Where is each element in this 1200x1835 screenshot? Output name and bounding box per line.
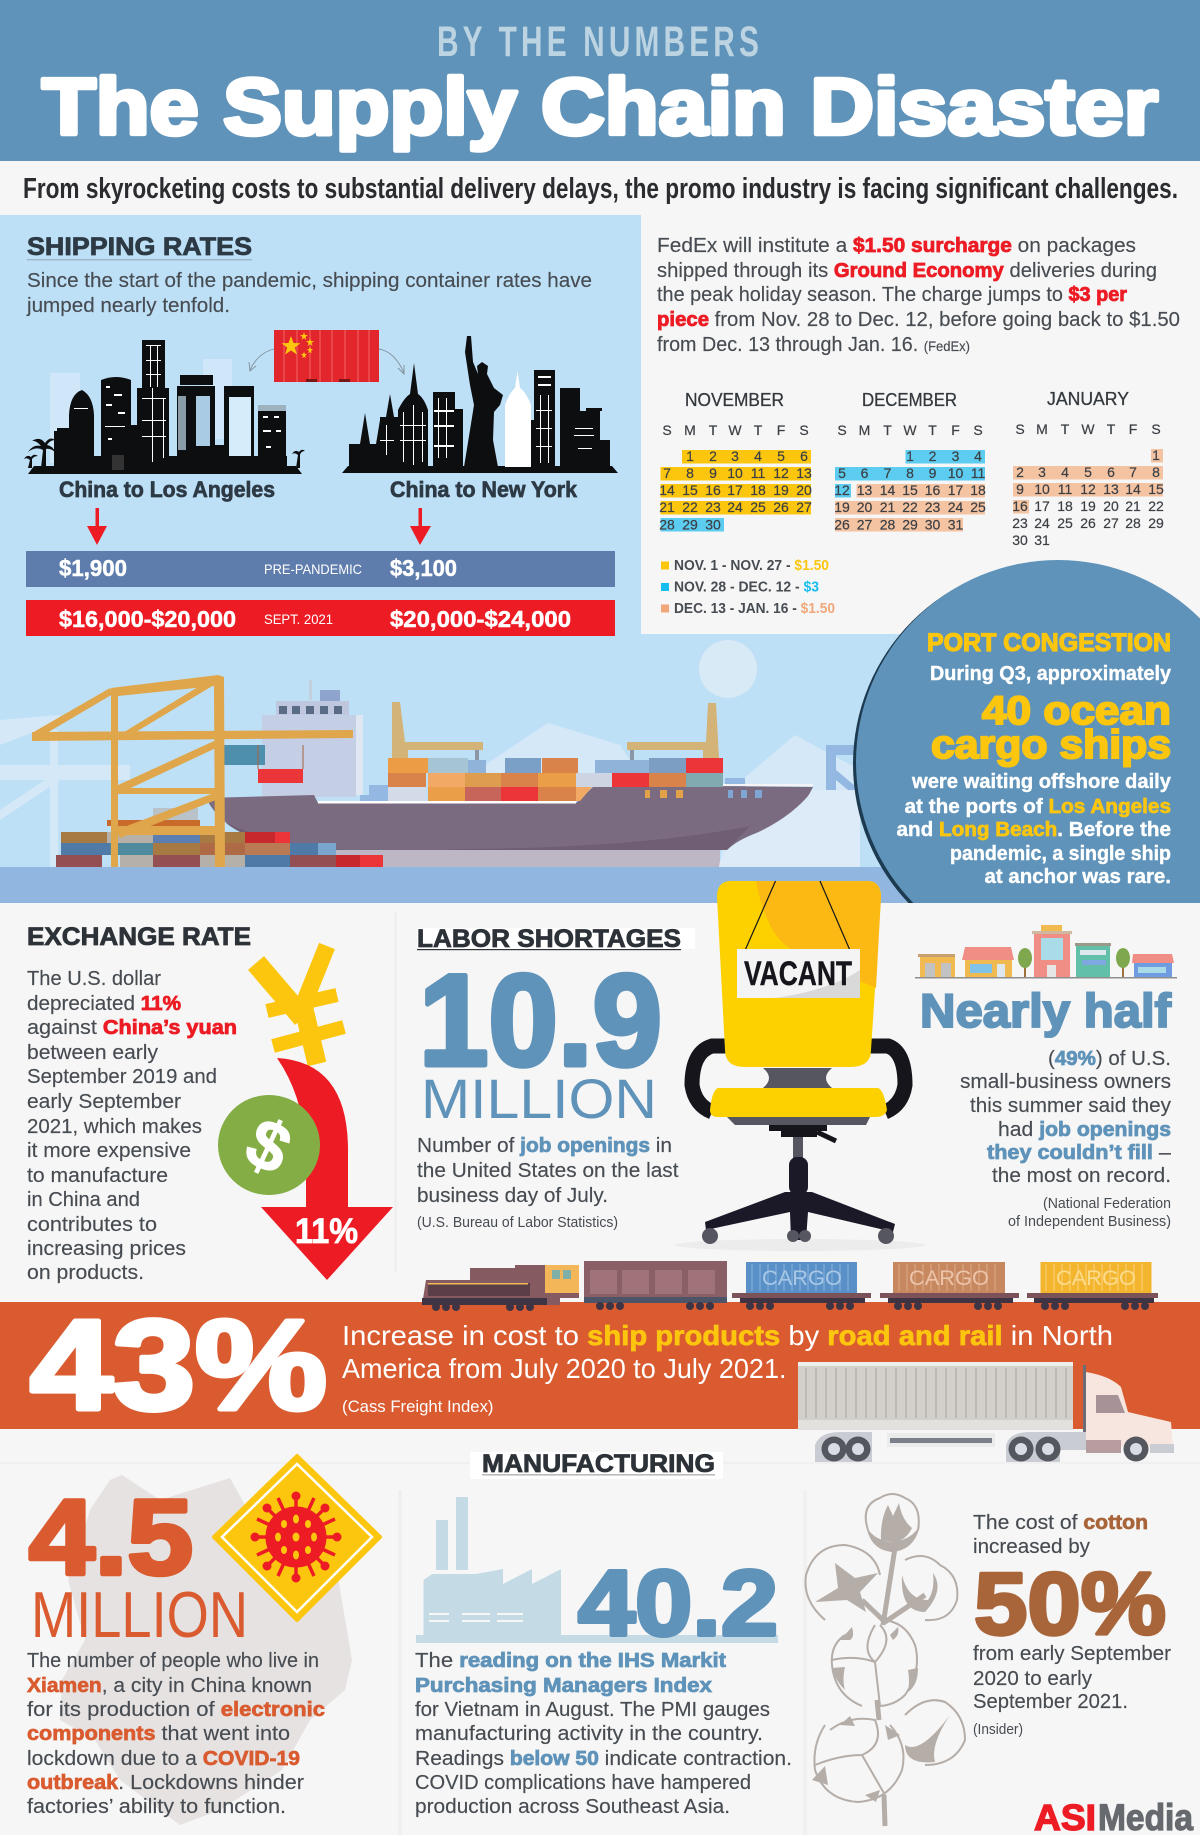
- moon: [699, 640, 757, 698]
- calendar: January: 30: [1012, 532, 1028, 548]
- text: waiting offshore: pandemic, a single ship: [950, 842, 1171, 865]
- ship containers: [388, 758, 723, 801]
- logo: ASI Media: [1034, 1797, 1193, 1835]
- panel: shipping rates: [24, 233, 618, 636]
- calendar: November: 10: [727, 465, 743, 481]
- exchange rate text: to manufacture: [27, 1164, 168, 1187]
- ship superstructure: [262, 680, 363, 797]
- stat: 40 ocean cargo ships: 40 ocean: [982, 689, 1171, 733]
- Xiamen text: lockdown due to a COVID-19: [27, 1747, 300, 1770]
- exchange rate text: against China’s yuan: [27, 1016, 237, 1039]
- text: waiting offshore: [896, 770, 1172, 888]
- calendar: November: 21: [659, 499, 675, 515]
- calendar: November: 7: [663, 465, 671, 481]
- calendar: November: 26: [773, 499, 789, 515]
- bar: pre-pandemic rates: PRE-PANDEMIC: [264, 561, 362, 577]
- PMI text: manufacturing activity in the country.: [415, 1722, 763, 1745]
- icon: virus warning sign: [214, 1456, 380, 1620]
- cotton text: increased by: [973, 1535, 1091, 1558]
- small business text: (49%) of U.S.: [1048, 1047, 1171, 1070]
- small business text: they couldn’t fill –: [987, 1141, 1172, 1164]
- road and rail text: Increase in cost to ship products by road and rail in North: [342, 1320, 1113, 1351]
- stat: nearly half: Nearly half: [920, 984, 1171, 1037]
- panel: road and rail cost: [0, 1261, 1200, 1462]
- calendar: December: 3: [952, 448, 960, 464]
- calendar: November: 19: [773, 482, 789, 498]
- Xiamen text: components that went into: [27, 1722, 290, 1745]
- icon: dollar coin: $: [234, 1102, 303, 1189]
- cotton text: [973, 1511, 1171, 1738]
- icon: falling arrow: [261, 1058, 393, 1280]
- calendar: November: NOVEMBER: [685, 390, 784, 410]
- exchange rate text: it more expensive: [27, 1139, 191, 1162]
- calendar: December: 27: [857, 516, 872, 532]
- icon: semi truck: [798, 1362, 1174, 1462]
- sign: [737, 949, 860, 998]
- port scene illustration: [0, 640, 1000, 903]
- calendar: December: 8: [906, 465, 914, 481]
- cotton text: from early September: [973, 1642, 1171, 1665]
- panel: FedEx surcharge: [641, 214, 1200, 634]
- road and rail text: (Cass Freight Index): [342, 1398, 494, 1416]
- calendar: December: 1: [906, 448, 914, 464]
- calendar: January: 25: [1057, 515, 1073, 531]
- calendar: January: F: [1129, 421, 1137, 437]
- seat: [710, 1088, 887, 1117]
- arrows from container: [249, 349, 404, 374]
- calendar: January: 13: [1103, 481, 1119, 497]
- calendar: November: M: [684, 422, 696, 438]
- icon: freight train: CARGO: [909, 1267, 989, 1290]
- FedEx text: piece from Nov. 28 to Dec. 12, before going back to $1.50: [657, 308, 1180, 331]
- calendar: January: 3: [1038, 464, 1046, 480]
- calendar: November: 14: [659, 482, 675, 498]
- calendar: November: 23: [705, 499, 721, 515]
- calendar: January: 16: [1012, 498, 1028, 514]
- arrow: Los Angeles rates: [87, 508, 107, 545]
- calendar: December: 17: [948, 482, 963, 498]
- calendar: December: 11: [971, 465, 985, 481]
- label: China to New York: China to New York: [390, 477, 578, 502]
- calendar: November: 27: [796, 499, 812, 515]
- crane hooks: [477, 750, 632, 760]
- header banner: [0, 0, 1200, 161]
- stat: 43 percent: 43%: [30, 1294, 327, 1437]
- FedEx text: the peak holiday season. The charge jumps to $3 per: [657, 283, 1127, 306]
- calendar: November: 3: [731, 448, 739, 464]
- calendar: January: 6: [1107, 464, 1115, 480]
- calendar: November: 18: [750, 482, 766, 498]
- heading: manufacturing: MANUFACTURING: [482, 1450, 715, 1478]
- cotton text: 2020 to early: [973, 1667, 1093, 1690]
- calendar: December: 4: [974, 448, 982, 464]
- intro text: Since the start of the pandemic, shipping container rates have: [27, 269, 592, 292]
- calendar: December: 13: [857, 482, 872, 498]
- bar: September 2021 rates: $20,000-$24,000: [390, 606, 571, 632]
- exchange rate text: [27, 967, 237, 1284]
- icon: vacant chair: [675, 881, 925, 1251]
- small business text: (National Federation: [1043, 1196, 1171, 1212]
- exchange rate text: 2021, which makes: [27, 1115, 202, 1138]
- arrow: New York rates: [410, 508, 431, 545]
- stat: 4.5 million: 4.5: [29, 1477, 193, 1597]
- Xiamen text: [27, 1649, 325, 1818]
- exchange rate text: between early: [27, 1041, 159, 1064]
- exchange rate text: on products.: [27, 1261, 144, 1284]
- calendar: November: 13: [796, 465, 812, 481]
- calendar: January: S: [1015, 421, 1025, 437]
- job openings text: business day of July.: [417, 1184, 608, 1207]
- calendar: December: M: [859, 422, 870, 438]
- PMI text: The reading on the IHS Markit: [415, 1649, 726, 1672]
- map: China silhouette: [60, 1475, 352, 1825]
- calendar: January: 22: [1148, 498, 1164, 514]
- calendar: December: 15: [902, 482, 918, 498]
- calendar: December: [834, 390, 986, 532]
- base: [769, 1125, 827, 1137]
- Xiamen text: for its production of electronic: [27, 1698, 325, 1721]
- stat: 40 ocean cargo ships: cargo ships: [931, 723, 1171, 767]
- icon: freight train: CARGO: [762, 1267, 842, 1290]
- calendar: January: 12: [1080, 481, 1096, 497]
- calendar: December: 10: [948, 465, 963, 481]
- PMI text: COVID complications have hampered: [415, 1771, 751, 1794]
- calendar: November: T: [754, 422, 763, 438]
- road and rail text: America from July 2020 to July 2021.: [342, 1353, 786, 1384]
- calendar: January: 11: [1058, 481, 1072, 497]
- calendar: November: 2: [709, 448, 717, 464]
- panel: labor shortages: [394, 881, 1177, 1272]
- small business text: the most on record.: [992, 1164, 1171, 1187]
- exchange rate text: depreciated 11%: [27, 992, 181, 1015]
- calendar: January: 9: [1016, 481, 1024, 497]
- calendar: November: 11: [751, 465, 765, 481]
- title: The Supply Chain Disaster: [42, 62, 1158, 151]
- text: during Q3: During Q3, approximately: [930, 662, 1172, 685]
- calendar: January: [1012, 389, 1164, 548]
- stat: 40.2: 40.2: [578, 1551, 778, 1655]
- calendar: November: 15: [682, 482, 698, 498]
- exchange rate text: contributes to: [27, 1213, 157, 1236]
- FedEx text: [657, 234, 1180, 356]
- virus: [250, 1492, 342, 1582]
- calendar: November: 9: [709, 465, 717, 481]
- calendar: December: 25: [970, 499, 986, 515]
- calendar: December: 26: [834, 516, 850, 532]
- small business text: had job openings: [998, 1118, 1171, 1141]
- calendar: December: 5: [838, 465, 846, 481]
- calendar: December: 29: [902, 516, 918, 532]
- calendar: December: 23: [925, 499, 940, 515]
- calendar: December: 30: [925, 516, 940, 532]
- text: waiting offshore: at the ports of Los Angeles: [904, 795, 1171, 818]
- bar: pre-pandemic rates: $1,900: [59, 555, 127, 581]
- stat: million: MILLION: [421, 1067, 657, 1130]
- calendar: January: JANUARY: [1047, 389, 1129, 409]
- stat: 50 percent: 50%: [974, 1554, 1166, 1653]
- calendar: December: 21: [880, 499, 895, 515]
- icon: Los Angeles skyline: [24, 340, 305, 474]
- cotton text: (Insider): [973, 1722, 1023, 1738]
- Xiamen text: outbreak. Lockdowns hinder: [27, 1771, 304, 1794]
- intro text: jumped nearly tenfold.: [26, 294, 230, 317]
- icon: yen symbol: [256, 946, 344, 1064]
- calendar: January: 23: [1012, 515, 1028, 531]
- calendar: November: 4: [754, 448, 762, 464]
- text: waiting offshore: were waiting offshore daily: [911, 770, 1172, 793]
- label: 11 percent: 11%: [295, 1212, 358, 1251]
- bar: September 2021 rates: [26, 600, 615, 636]
- calendar: November: 30: [705, 516, 721, 532]
- PMI text: [415, 1649, 792, 1818]
- hull: [206, 785, 813, 850]
- calendar: January: W: [1081, 421, 1095, 437]
- Xiamen text: factories’ ability to function.: [27, 1795, 286, 1818]
- calendar: January: M: [1036, 421, 1048, 437]
- calendar: January: 21: [1125, 498, 1141, 514]
- calendar: November: 29: [682, 516, 698, 532]
- panel: exchange rate: [27, 923, 393, 1284]
- calendar: January: 15: [1148, 481, 1164, 497]
- calendar: December: F: [951, 422, 960, 438]
- panel: port congestion: [853, 560, 1200, 903]
- calendar: December: 31: [948, 516, 963, 532]
- calendar: November: F: [777, 422, 785, 438]
- job openings text: [417, 1134, 679, 1231]
- panel: manufacturing: [0, 1450, 1200, 1835]
- icon: freight train: [422, 1261, 1158, 1311]
- calendar: November: S: [799, 422, 809, 438]
- calendar: January: S: [1151, 421, 1161, 437]
- sign: VACANT: [744, 955, 852, 993]
- bar: September 2021 rates: $16,000-$20,000: [59, 606, 236, 632]
- stat: 4.5 million: MILLION: [31, 1578, 248, 1651]
- dock containers: [56, 808, 383, 867]
- stems: [862, 1535, 925, 1826]
- calendar: December: 28: [880, 516, 895, 532]
- water: [0, 867, 1000, 903]
- calendar: November: S: [662, 422, 672, 438]
- heading: port congestion: PORT CONGESTION: [927, 629, 1171, 657]
- exchange rate text: increasing prices: [27, 1237, 186, 1260]
- FedEx text: from Dec. 13 through Jan. 16. (FedEx): [657, 333, 970, 356]
- exchange rate text: early September: [27, 1090, 181, 1113]
- calendar: January: 5: [1084, 464, 1092, 480]
- cotton text: September 2021.: [973, 1690, 1128, 1713]
- label: China to Los Angeles: China to Los Angeles: [59, 477, 275, 502]
- calendar: January: 29: [1148, 515, 1164, 531]
- background port silhouettes: [0, 715, 860, 867]
- Xiamen text: Xiamen, a city in China known: [27, 1674, 312, 1697]
- icon: cotton plant: [805, 1494, 965, 1826]
- small business text: this summer said they: [970, 1094, 1172, 1117]
- calendar: November: 24: [727, 499, 743, 515]
- calendar: December: 24: [948, 499, 963, 515]
- calendar: December: 22: [902, 499, 918, 515]
- calendar: January: T: [1107, 421, 1116, 437]
- job openings text: Number of job openings in: [417, 1134, 672, 1157]
- calendar: January: 19: [1080, 498, 1096, 514]
- calendar: December: 14: [880, 482, 895, 498]
- calendar: January: 8: [1152, 464, 1160, 480]
- calendar: December: 16: [925, 482, 940, 498]
- deck cranes: [392, 702, 719, 758]
- calendar: December: 6: [861, 465, 869, 481]
- calendar: January: 2: [1016, 464, 1024, 480]
- calendar: November: 6: [800, 448, 808, 464]
- PMI text: for Vietnam in August. The PMI gauges: [415, 1698, 770, 1721]
- intro text: [26, 269, 592, 317]
- dock crane: [32, 675, 353, 867]
- calendar: December: T: [928, 422, 937, 438]
- Xiamen text: The number of people who live in: [27, 1649, 319, 1672]
- bar: pre-pandemic rates: [26, 551, 615, 587]
- calendar: November: 28: [659, 516, 675, 532]
- calendar: January: 17: [1034, 498, 1050, 514]
- calendar legend: DEC. 13 - JAN. 16 - $1.50: [674, 601, 835, 617]
- PMI text: Purchasing Managers Index: [415, 1674, 713, 1697]
- calendar: December: W: [903, 422, 917, 438]
- calendar: November: 25: [750, 499, 766, 515]
- text: waiting offshore: at anchor was rare.: [984, 865, 1171, 888]
- calendar: January: 27: [1103, 515, 1119, 531]
- calendar legend: NOV. 1 - NOV. 27 - $1.50: [674, 558, 829, 574]
- calendar: December: S: [973, 422, 983, 438]
- calendar: January: 10: [1034, 481, 1050, 497]
- heading: labor shortages: LABOR SHORTAGES: [417, 925, 681, 953]
- FedEx text: shipped through its Ground Economy deliveries during: [657, 259, 1157, 282]
- exchange rate text: The U.S. dollar: [27, 967, 161, 990]
- calendar: January: 18: [1057, 498, 1073, 514]
- calendar: January: 28: [1125, 515, 1141, 531]
- calendar: November: [659, 390, 812, 532]
- road and rail text: [342, 1320, 1113, 1416]
- small business text: of Independent Business): [1008, 1214, 1171, 1230]
- job openings text: (U.S. Bureau of Labor Statistics): [417, 1215, 618, 1231]
- calendar: January: 7: [1129, 464, 1137, 480]
- calendar: December: 7: [884, 465, 892, 481]
- small business text: [960, 1047, 1172, 1230]
- stat: 10.9: 10.9: [419, 947, 662, 1093]
- heading: shipping rates: SHIPPING RATES: [27, 233, 252, 261]
- PMI text: production across Southeast Asia.: [415, 1795, 730, 1818]
- text: waiting offshore: and Long Beach. Before the: [896, 818, 1171, 841]
- calendar: November: 17: [727, 482, 743, 498]
- cotton text: The cost of cotton: [973, 1511, 1148, 1534]
- small business text: small-business owners: [960, 1070, 1171, 1093]
- calendar: January: 4: [1061, 464, 1069, 480]
- stat: 4.5 million: [29, 1477, 248, 1651]
- calendar: January: 31: [1034, 532, 1050, 548]
- icon: China container: [274, 330, 379, 382]
- calendar: January: 14: [1125, 481, 1141, 497]
- sepals: [812, 1503, 950, 1802]
- icon: small businesses: [915, 925, 1177, 978]
- calendar: January: T: [1061, 421, 1070, 437]
- heading: exchange rate: EXCHANGE RATE: [27, 923, 251, 951]
- calendar: November: 20: [796, 482, 812, 498]
- stat: 40 ocean cargo ships: [931, 689, 1171, 767]
- calendar: November: T: [709, 422, 718, 438]
- calendar: December: 12: [834, 482, 850, 498]
- calendar: December: 9: [929, 465, 937, 481]
- calendar: January: 24: [1034, 515, 1050, 531]
- bar: September 2021 rates: SEPT. 2021: [264, 611, 333, 627]
- calendar: November: 1: [686, 448, 694, 464]
- ship: [206, 680, 860, 867]
- background blue cranes: [360, 745, 860, 868]
- calendar: December: 19: [834, 499, 850, 515]
- calendar: November: 22: [682, 499, 698, 515]
- icon: New York skyline: [342, 336, 618, 473]
- icon: dollar coin: [218, 1095, 320, 1195]
- icon: freight train: CARGO: [1056, 1267, 1136, 1290]
- exchange rate text: September 2019 and: [27, 1065, 217, 1088]
- calendar: November: 12: [773, 465, 789, 481]
- kicker: by the numbers: BY THE NUMBERS: [437, 18, 763, 66]
- calendar: November: 5: [777, 448, 785, 464]
- arms: [692, 1046, 905, 1112]
- calendar: December: T: [883, 422, 892, 438]
- calendar: December: DECEMBER: [862, 390, 957, 410]
- calendar: December: 20: [857, 499, 872, 515]
- boll outlines: [805, 1494, 965, 1802]
- calendar: January: 20: [1103, 498, 1119, 514]
- seat back: [717, 881, 881, 1067]
- PMI text: Readings below 50 indicate contraction.: [415, 1747, 792, 1770]
- job openings text: the United States on the last: [417, 1159, 679, 1182]
- bar: pre-pandemic rates: $3,100: [390, 555, 457, 581]
- calendar: December: 2: [929, 448, 937, 464]
- icon: factory: [416, 1497, 778, 1643]
- calendar: November: W: [728, 422, 742, 438]
- calendar: November: 8: [686, 465, 694, 481]
- palms: [24, 439, 305, 468]
- ropes: [743, 881, 852, 955]
- calendar legend: [661, 558, 835, 617]
- panel: shipping rates background and port scene sky: [0, 215, 1200, 868]
- calendar: December: S: [837, 422, 847, 438]
- calendar: December: 18: [970, 482, 986, 498]
- FedEx text: FedEx will institute a $1.50 surcharge on packages: [657, 234, 1136, 257]
- calendar: January: 26: [1080, 515, 1096, 531]
- calendar: November: 16: [705, 482, 721, 498]
- calendar: January: 1: [1152, 447, 1160, 463]
- calendar legend: NOV. 28 - DEC. 12 - $3: [674, 580, 819, 596]
- exchange rate text: in China and: [27, 1188, 140, 1211]
